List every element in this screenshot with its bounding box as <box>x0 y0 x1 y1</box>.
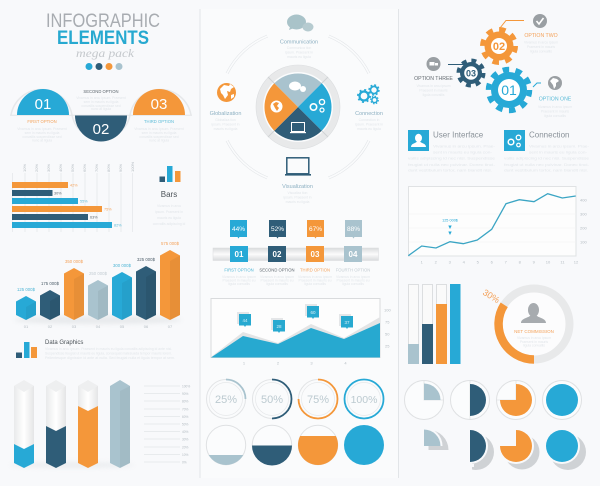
data graphics heading block <box>16 340 175 360</box>
chart: line chart <box>408 186 587 264</box>
bars heading block <box>153 166 185 226</box>
pie 100 shadow <box>544 428 586 470</box>
column axis labels: 05 <box>120 324 125 329</box>
step descriptions: Praesent in mauris eu <box>223 278 256 282</box>
chart: vertical progress bars <box>408 284 460 364</box>
icon: user tile <box>408 130 429 151</box>
line chart axes: 7 <box>505 260 508 264</box>
pie: communication <box>274 73 322 107</box>
ring 50: 50% <box>261 394 283 406</box>
body text: sem in mauris eu ligula <box>84 100 118 104</box>
line chart axes: 400 <box>580 198 587 202</box>
text: bars description: convallis adipiscing id <box>153 222 185 226</box>
step 02 <box>268 246 286 262</box>
callout 28: 28 <box>276 324 282 329</box>
chart: 3D columns <box>14 241 182 329</box>
pie 50 shadow <box>470 430 494 470</box>
text: communication <box>285 46 313 59</box>
colour dots <box>86 63 122 70</box>
gear 01 <box>488 70 530 110</box>
column 01 <box>16 287 36 320</box>
text: visualization <box>283 191 312 204</box>
icon: connection tile <box>504 130 525 151</box>
column 07: 575 000$ <box>161 241 180 246</box>
percentage scale: 30% <box>182 438 189 442</box>
gauge value arc <box>499 305 534 360</box>
percentage scale: 90% <box>182 392 189 396</box>
text: data graphics description: Vivamus in arcu ipsum. Praesent in mauris eu ligula convallis adipiscing id ante nisi. <box>45 347 172 351</box>
level 50 <box>252 425 292 466</box>
step 01 <box>230 246 248 262</box>
step 04: 04 <box>349 250 358 259</box>
text: option three: Vivamus in arcu ipsum <box>416 84 451 88</box>
body text: Vivamus in arcu ipsum. Praesent <box>17 127 67 131</box>
bar blue <box>450 284 460 364</box>
bar values: 63% <box>90 216 98 220</box>
body text: convallis suspendisse sed <box>81 104 121 108</box>
text: option three: Praesent in mauris <box>419 88 448 92</box>
percentage scale: 40% <box>182 430 189 434</box>
area chart axes: 50 <box>385 332 390 336</box>
title: elements: ELEMENTS <box>57 28 149 49</box>
text: visualization: mauris eu ligula <box>286 200 309 204</box>
gauge ring <box>498 288 570 360</box>
option 01 <box>17 89 69 115</box>
axis labels: 20% <box>34 164 39 172</box>
axis labels: 70% <box>94 164 99 172</box>
text: connection: Connection in <box>359 118 379 122</box>
text: user interface: feugiat ut nulla nec pulvinar. Donec tinci- <box>408 163 495 167</box>
level 25 <box>206 425 246 465</box>
body text: sem in mauris eu ligula <box>25 131 59 135</box>
label: globalization: Globalization <box>210 111 241 117</box>
step descriptions: Praesent in mauris eu <box>261 278 294 282</box>
line chart axes: 6 <box>491 260 494 264</box>
text: option one: Praesent in mauris <box>541 110 569 114</box>
column 07 <box>160 241 180 320</box>
percent tag 52: 52% <box>271 226 284 233</box>
step descriptions: Praesent in mauris eu <box>337 278 370 282</box>
axis labels: 30% <box>46 164 51 172</box>
pie 75 shadow <box>498 428 540 470</box>
bar values: 82% <box>114 224 122 228</box>
bar values: 75% <box>104 208 112 212</box>
line chart axes <box>421 198 587 264</box>
text: connection <box>504 144 589 172</box>
data line <box>408 194 576 256</box>
axis labels: 10% <box>22 164 27 172</box>
line chart axes: 300 <box>580 212 587 216</box>
label: fourth option: FOURTH OPTION <box>336 268 370 272</box>
step 03 <box>306 246 324 262</box>
panel: fill level circles <box>206 425 384 466</box>
icon: check <box>533 14 547 28</box>
label: first option: FIRST OPTION <box>27 119 57 124</box>
icon: gears <box>358 85 379 104</box>
bar values <box>54 184 122 228</box>
column steel 100 <box>110 380 130 468</box>
column dark 50 <box>46 380 66 468</box>
callout 28 <box>271 318 285 333</box>
label: second option: SECOND OPTION <box>259 268 295 272</box>
text: bars description: Vivamus in arcu <box>157 204 181 208</box>
text: bars description <box>153 204 185 226</box>
level 75 <box>298 425 338 465</box>
pie 25 ring <box>404 380 444 420</box>
line chart axes: 200 <box>580 226 587 230</box>
label: third option: THIRD OPTION <box>144 119 174 124</box>
text: user interface: Vivamus in arcu ipsum. Prae- <box>433 144 495 148</box>
text: user interface: sent in mauris eu ligula con- <box>433 150 492 154</box>
step descriptions: ligula convallis <box>342 282 364 286</box>
text: communication: mauris eu ligula <box>287 55 311 59</box>
gear 02 <box>482 30 516 62</box>
option 03: 03 <box>151 96 167 113</box>
gear 03 <box>458 60 484 86</box>
gauge percent: 30% <box>481 287 502 305</box>
percentage scale: 10% <box>182 453 189 457</box>
percentage scale: 20% <box>182 446 189 450</box>
column 04: 250 000$ <box>89 271 108 276</box>
icon: data graphics bars <box>16 342 37 358</box>
pie: globalization <box>264 83 298 131</box>
chart: 3D progress columns <box>10 380 190 468</box>
percent tag 44 <box>230 220 247 238</box>
step descriptions: ligula convallis <box>304 282 326 286</box>
step descriptions: Vivamus in arcu ipsum <box>336 275 370 279</box>
subtitle: mega pack: mega pack <box>76 46 135 60</box>
percent tag 44: 44% <box>232 226 245 233</box>
column axis labels <box>24 324 173 329</box>
percentage scale: 50% <box>182 422 189 426</box>
step 04 <box>344 246 362 262</box>
heading: data graphics: Data Graphics <box>45 340 83 346</box>
text: connection <box>355 118 383 131</box>
text: connection: feugiat ut nulla nec pulvinar. Donec tinci- <box>504 163 589 167</box>
line chart axes: 10 <box>546 260 551 264</box>
text: option two: ligula convallis <box>530 50 552 54</box>
icon: person <box>521 303 546 323</box>
chart: area chart <box>211 298 391 366</box>
column 04 <box>88 271 108 320</box>
text: option one <box>538 105 572 118</box>
option 01: 01 <box>35 96 51 113</box>
icon: grey globe <box>548 76 562 90</box>
icon: bars <box>160 166 180 182</box>
text: user interface: dunt vestibulum tortor, nam blandit nisi. <box>408 168 492 172</box>
option 03 <box>133 89 185 115</box>
option 02: 02 <box>93 121 109 138</box>
percent tag 88: 88% <box>347 226 360 233</box>
body text: convallis suspendisse sed <box>22 135 62 139</box>
body text: Vivamus in arcu ipsum. Praesent <box>134 127 184 131</box>
panel: four step slider <box>213 220 378 286</box>
label: net commission: NET COMMISSION <box>514 329 554 334</box>
body text: sem in mauris eu ligula <box>142 131 176 135</box>
column 05 <box>112 263 132 320</box>
text: option one: ligula convallis <box>544 114 566 118</box>
ring 25 <box>206 380 246 418</box>
column blue 25 <box>14 380 34 468</box>
icon: truck <box>426 57 440 71</box>
axis labels <box>22 161 135 172</box>
value callout: 125 000$ <box>442 218 459 222</box>
line chart axes: 100 <box>580 240 587 244</box>
pie: visualization <box>274 107 322 141</box>
ring 75: 75% <box>307 394 329 406</box>
ring 50 <box>252 380 292 418</box>
step descriptions: Praesent in mauris eu <box>299 278 332 282</box>
column 02: 175 000$ <box>41 281 60 286</box>
bar orange <box>436 284 447 364</box>
outer ring <box>256 65 340 149</box>
label: connection: Connection <box>355 111 383 117</box>
axis labels: 90% <box>118 164 123 172</box>
heading: connection: Connection <box>529 130 569 140</box>
percent tag 67 <box>307 220 324 238</box>
percentage scale <box>144 384 190 464</box>
axis labels: 50% <box>70 164 75 172</box>
label: third option: THIRD OPTION <box>300 268 330 272</box>
label: visualization: Visualization <box>282 184 313 190</box>
text: communication: ipsum. Praesent in <box>285 50 313 54</box>
bars <box>12 182 112 228</box>
ring 25: 25% <box>215 394 237 406</box>
column axis labels: 01 <box>24 324 29 329</box>
percent tag 67: 67% <box>309 226 322 233</box>
axis labels: 40% <box>58 164 63 172</box>
icon: chat bubbles <box>287 14 314 32</box>
area chart axes: 4 <box>344 360 347 366</box>
text: data graphics description <box>45 347 175 360</box>
area chart axes: 1 <box>243 360 246 366</box>
icon: pie globe <box>270 100 282 112</box>
blue area <box>211 323 380 358</box>
area chart axes: 2 <box>277 360 280 366</box>
label: option two: OPTION TWO <box>524 33 558 39</box>
line chart axes: 1 <box>421 260 424 264</box>
step descriptions: Vivamus in arcu ipsum <box>222 275 256 279</box>
panel: circular concept diagram <box>210 14 383 204</box>
bar steel <box>408 284 419 364</box>
line chart axes: 9 <box>533 260 536 264</box>
panel: pie segments with shadows <box>424 428 586 470</box>
pie 75 ring <box>496 380 536 420</box>
percentage scale: 60% <box>182 415 189 419</box>
panel: three options <box>10 89 192 142</box>
decorative arcs <box>226 35 370 179</box>
area chart axes: 25 <box>385 344 390 348</box>
bar values: 30% <box>54 192 62 196</box>
gear 03: 03 <box>466 68 476 78</box>
body text: Vivamus in arcu ipsum. Praesent <box>76 96 126 100</box>
icon: globe <box>217 83 236 102</box>
line chart axes: 5 <box>477 260 480 264</box>
callout 44: 44 <box>242 318 248 323</box>
connector: option one <box>533 83 541 87</box>
text: connection: Vivamus in arcu ipsum. Prae- <box>529 144 589 148</box>
area chart axes: 100 <box>384 308 391 312</box>
label: first option: FIRST OPTION <box>224 268 254 272</box>
body text: nunc at ligula <box>91 107 111 111</box>
panel: progress rings <box>206 380 384 418</box>
step 03: 03 <box>311 250 320 259</box>
pie: connection <box>298 83 332 131</box>
heading: bars: Bars <box>161 190 177 199</box>
text: globalization: mauris eu ligula <box>214 127 237 131</box>
panel: gear options <box>414 14 572 118</box>
line chart axes: 2 <box>435 260 438 264</box>
text: user interface <box>408 144 495 172</box>
ring 100: 100% <box>351 394 377 406</box>
percentage scale: 80% <box>182 400 189 404</box>
area chart axes <box>243 308 391 366</box>
text: option two: Vivamus in arcu ipsum <box>524 40 558 44</box>
icon: pie laptop <box>290 122 306 133</box>
column 06: 325 000$ <box>137 257 156 262</box>
text: communication: Communica tion <box>287 46 311 50</box>
step descriptions: Vivamus in arcu ipsum <box>298 275 332 279</box>
label: second option: SECOND OPTION <box>83 89 119 94</box>
title block <box>46 11 160 70</box>
axis labels: 80% <box>106 164 111 172</box>
percentage scale: 70% <box>182 408 189 412</box>
connector: option two <box>500 20 524 28</box>
percentage scale: 100% <box>182 384 190 388</box>
column 03: 350 000$ <box>65 259 84 264</box>
panel: connection <box>504 130 589 172</box>
line chart axes: 8 <box>519 260 522 264</box>
panel: net commission gauge <box>481 287 570 360</box>
pie 50 ring <box>450 380 490 420</box>
horizontal bar chart <box>12 161 135 232</box>
text: user interface: vallis adipiscing id nec nisi. Suspendisse <box>408 156 495 160</box>
panel: user interface <box>408 130 495 172</box>
bar dark <box>422 284 433 364</box>
callout 60: 60 <box>310 310 316 315</box>
pie 25 shadow <box>424 428 449 450</box>
area chart axes: 75 <box>385 320 390 324</box>
body text <box>17 96 184 142</box>
option 02 <box>75 116 127 142</box>
text: option three: ligula convallis <box>423 93 445 97</box>
value callout <box>442 218 459 235</box>
level 100 <box>344 425 384 465</box>
column 01: 125 000$ <box>17 287 36 292</box>
text: connection: ipsum. Praesent in <box>355 122 383 126</box>
panel: pie segments in rings <box>404 380 582 420</box>
column 02 <box>40 281 60 320</box>
line chart axes: 12 <box>574 260 579 264</box>
label: option three: OPTION THREE <box>414 76 453 82</box>
text: connection: sent in mauris eu ligula con- <box>529 150 587 154</box>
column axis labels: 03 <box>72 324 77 329</box>
column axis labels: 02 <box>48 324 53 329</box>
heading: user interface: User Interface <box>433 130 484 140</box>
column 05: 300 000$ <box>113 263 132 268</box>
text: bars description: mauris eu ligula <box>157 216 181 220</box>
text: net commission: Vivamus in arcu ipsum <box>517 336 551 340</box>
text: option two <box>524 40 558 54</box>
icon: laptop <box>285 158 311 176</box>
axis labels: 100% <box>130 161 135 172</box>
icon: pie gears <box>310 99 325 112</box>
text: option three <box>416 84 451 97</box>
text: globalization <box>211 118 240 131</box>
step 02: 02 <box>273 250 282 259</box>
text: option one: Vivamus in arcu ipsum <box>538 105 572 109</box>
body text: nunc at ligula <box>32 138 52 142</box>
percent tag 88 <box>345 220 362 238</box>
callout 37: 37 <box>344 320 350 325</box>
column axis labels: 04 <box>96 324 101 329</box>
callout 37 <box>339 314 353 329</box>
step descriptions: ligula convallis <box>266 282 288 286</box>
text: bars description: ipsum. Praesent in <box>155 210 183 214</box>
bar values: 55% <box>80 200 88 204</box>
step descriptions <box>222 275 370 286</box>
body text: convallis suspendisse sed <box>139 135 179 139</box>
connector: option three <box>448 64 470 66</box>
text: visualization: ipsum. Praesent in <box>283 196 312 200</box>
text: globalization: ipsum. Praesent in <box>211 122 240 126</box>
text: connection: dunt vestibulum tortor, nam blandit nisi. <box>504 168 588 172</box>
slider track <box>213 248 378 260</box>
ring 75 <box>298 380 338 418</box>
text: net commission: ligula convallis <box>523 344 545 348</box>
title: infographic: INFOGRAPHIC <box>46 11 160 32</box>
column 06 <box>136 257 156 320</box>
text: option two: Praesent in mauris <box>527 45 555 49</box>
pie 100 ring <box>542 380 582 420</box>
gear 02: 02 <box>493 41 505 53</box>
icon: pie chat <box>289 82 306 92</box>
callout 60 <box>305 304 319 319</box>
body text: nunc at ligula <box>149 138 169 142</box>
column axis labels: 07 <box>168 324 173 329</box>
column 03 <box>64 259 84 320</box>
grey area <box>211 317 380 357</box>
text: data graphics description: Pellentesque dignissim id ante at nulla. Sed feugiat nulla et ligula tempor at sem. <box>45 356 175 360</box>
text: data graphics description: Suspendisse feugiat ut mauris eu ligula, consequat malesuada tempor mauris lorem. <box>45 352 172 356</box>
ring 100 <box>344 380 384 418</box>
bar values: 42% <box>70 184 78 188</box>
column orange 75 <box>78 380 98 468</box>
text: connection: mauris eu ligula <box>357 127 381 131</box>
label: communication: Communication <box>280 40 318 46</box>
label: option one: OPTION ONE <box>539 96 572 102</box>
line chart axes: 4 <box>463 260 466 264</box>
text: net commission <box>517 336 551 348</box>
gear 01: 01 <box>501 82 517 98</box>
text: net commission: Praesent in mauris <box>520 340 548 344</box>
text: connection: vallis adipiscing id nec nisi. Suspendisse <box>504 156 589 160</box>
axis labels: 60% <box>82 164 87 172</box>
text: visualization: Visualiza tion <box>288 191 308 195</box>
step 01: 01 <box>235 250 244 259</box>
percentage scale: 0% <box>182 460 187 464</box>
step descriptions: ligula convallis <box>228 282 250 286</box>
text: globalization: Globaliza tion <box>215 118 236 122</box>
callout 44 <box>237 312 251 327</box>
percent tag 52 <box>269 220 286 238</box>
column axis labels: 06 <box>144 324 149 329</box>
line chart axes: 11 <box>560 260 565 264</box>
area chart axes: 3 <box>310 360 313 366</box>
step descriptions: Vivamus in arcu ipsum <box>260 275 294 279</box>
line chart axes: 3 <box>449 260 452 264</box>
